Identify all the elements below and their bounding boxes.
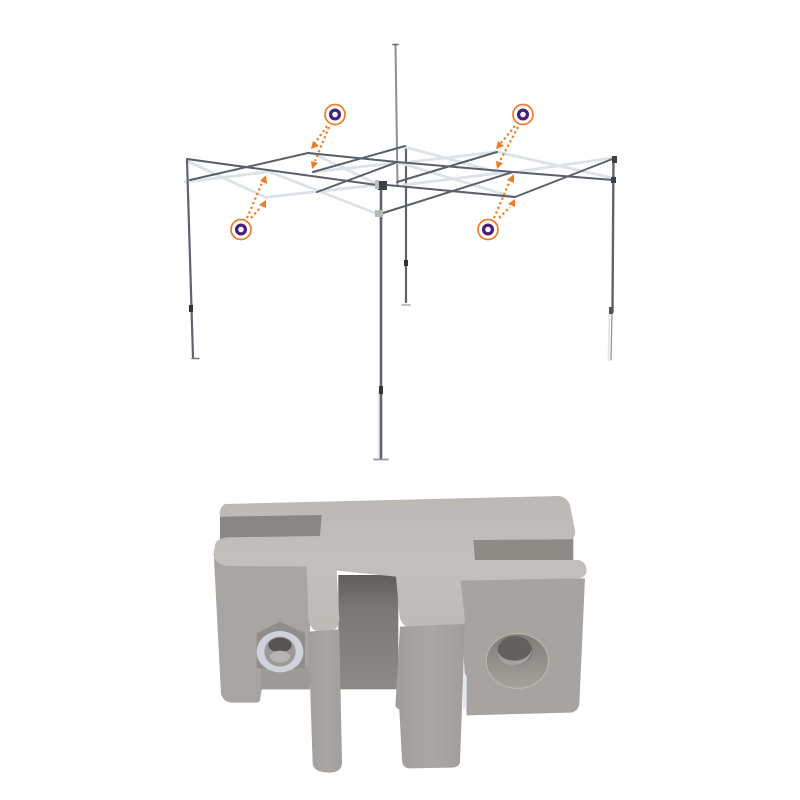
left front face: [214, 558, 310, 703]
back leg: [402, 147, 410, 305]
bolt highlight: [463, 670, 467, 710]
callout: lower left marker: [231, 175, 267, 240]
right leg: [608, 156, 617, 360]
dark top rails: [187, 146, 615, 213]
shaded recess under nut: [261, 667, 310, 689]
top T surface: [213, 496, 587, 632]
right fork leg: [395, 624, 465, 768]
countersunk hole: [486, 634, 548, 688]
front leg: [374, 180, 388, 460]
middle dark channel: [338, 575, 398, 689]
back recesses: [220, 513, 573, 562]
white scissor trusses: [185, 147, 613, 213]
left leg: [187, 160, 199, 358]
callout: upper right marker: [496, 104, 533, 169]
center pole: [393, 44, 398, 185]
canopy frame illustration: [185, 44, 617, 460]
callout: upper left marker: [311, 104, 345, 169]
right front face: [460, 578, 585, 715]
bracket product photo illustration: [213, 496, 587, 773]
left fork leg: [308, 629, 342, 773]
nut and washer: [257, 622, 305, 672]
callout: lower right marker: [478, 174, 515, 240]
